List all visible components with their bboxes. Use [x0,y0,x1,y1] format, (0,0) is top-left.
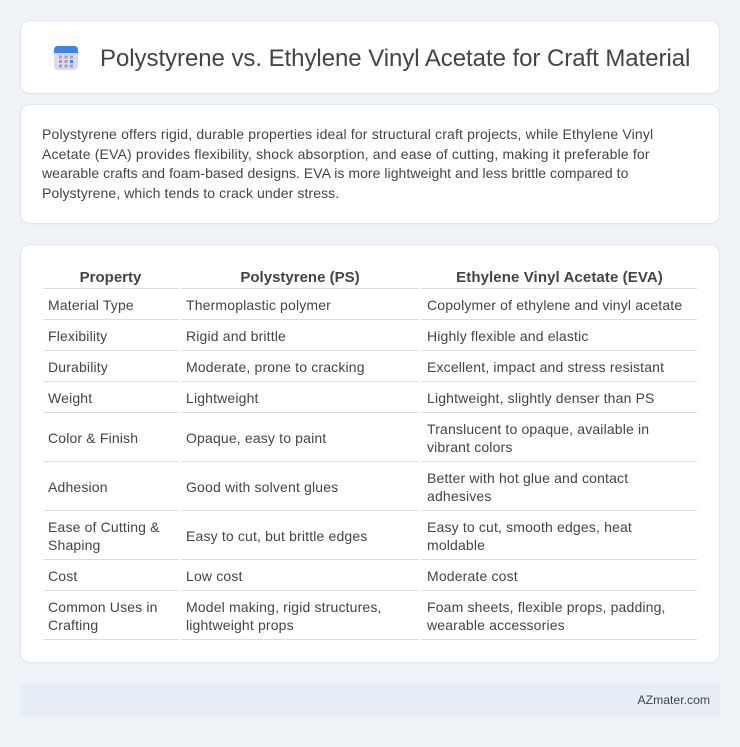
table header: Ethylene Vinyl Acetate (EVA) [456,269,663,286]
footer bar [20,683,720,717]
table rows: Moderate cost [427,568,518,584]
table rows: Thermoplastic polymer [186,297,331,313]
table rows: Lightweight, slightly denser than PS [427,390,655,406]
table rows: moldable [427,537,485,553]
summary text: Acetate (EVA) provides flexibility, shock absorption, and ease of cutting, making it preferable for [42,146,650,162]
table header [80,269,663,286]
table rows: Rigid and brittle [186,328,286,344]
title: Polystyrene vs. Ethylene Vinyl Acetate for Craft Material [100,45,690,72]
table rows: adhesives [427,488,491,504]
summary text [42,126,653,201]
table rows: Copolymer of ethylene and vinyl acetate [427,297,682,313]
table rows: Better with hot glue and contact [427,470,628,486]
table rows: Common Uses in [48,599,158,615]
table rows: Adhesion [48,479,108,495]
table rows: Model making, rigid structures, [186,599,382,615]
table panel [20,244,720,663]
table rows: Opaque, easy to paint [186,430,326,446]
table rows: Good with solvent glues [186,479,338,495]
table rows: Foam sheets, flexible props, padding, [427,599,666,615]
table rows: Excellent, impact and stress resistant [427,359,664,375]
table rows: wearable accessories [427,617,565,633]
summary text: Polystyrene, which tends to crack under stress. [42,185,339,201]
table rows: Color & Finish [48,430,138,446]
table rows: Moderate, prone to cracking [186,359,365,375]
table rows: Cost [48,568,77,584]
table rows: Translucent to opaque, available in [427,421,649,437]
table rows: Easy to cut, smooth edges, heat [427,519,632,535]
table rows: Crafting [48,617,98,633]
table rows: Low cost [186,568,243,584]
table rows: lightweight props [186,617,294,633]
table rows: Highly flexible and elastic [427,328,589,344]
table rows: Lightweight [186,390,259,406]
table rows: Flexibility [48,328,107,344]
table rows: Easy to cut, but brittle edges [186,528,367,544]
summary text: Polystyrene offers rigid, durable properties ideal for structural craft projects, while Ethylene Vinyl [42,126,653,142]
table rows: vibrant colors [427,439,512,455]
header panel [20,20,720,94]
summary text: wearable crafts and foam-based designs. EVA is more lightweight and less brittle compared to [42,165,628,181]
table rows: Ease of Cutting & [48,519,160,535]
table rows: Shaping [48,537,100,553]
summary panel [20,104,720,224]
icon: calendar grid [54,46,78,70]
table header: Polystyrene (PS) [240,269,360,286]
table header: Property [80,269,141,286]
table rows: Durability [48,359,108,375]
table rows: Material Type [48,297,134,313]
footer text: AZmater.com [638,693,710,707]
table rows: Weight [48,390,92,406]
